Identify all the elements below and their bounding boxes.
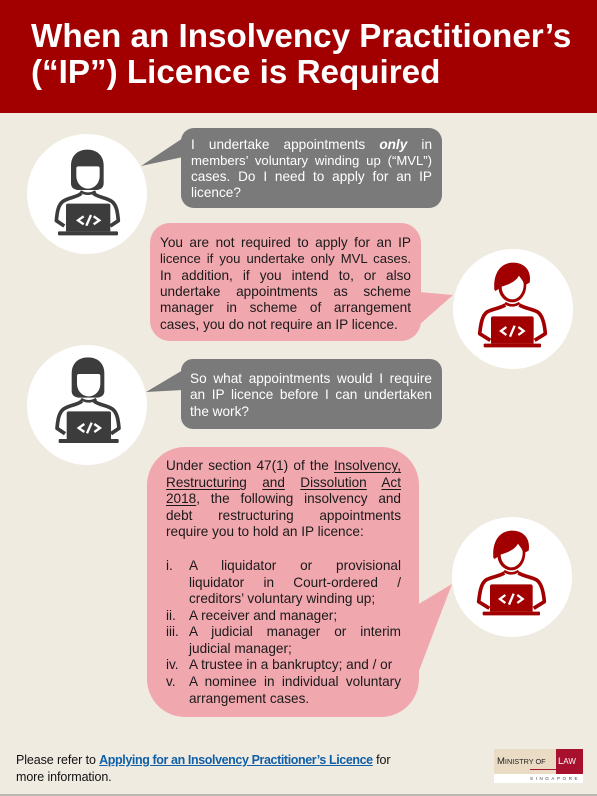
list of appointments (166, 558, 401, 706)
list of appointments: creditors’ voluntary winding up; (189, 591, 375, 606)
list of appointments: arrangement cases. (189, 691, 309, 706)
question bubble 1 (181, 128, 442, 208)
logo: Ministry of Law Singapore: SINGAPORE (530, 776, 580, 781)
answer 2 text: require you to hold an IP licence: (166, 524, 364, 539)
list of appointments: A trustee in a bankruptcy; and / or (189, 657, 392, 672)
title text (31, 18, 571, 91)
logo: Ministry of Law Singapore: MINISTRY OF (497, 756, 546, 767)
footer note (16, 753, 390, 784)
avatar: female user 2 (27, 345, 147, 465)
list of appointments: iii. (166, 624, 179, 639)
answer 2 text (166, 458, 401, 706)
list of appointments: A nominee in individual voluntary (189, 674, 401, 689)
question bubble 2 (181, 359, 442, 429)
list of appointments: A liquidator or provisional (189, 558, 401, 573)
list of appointments: ii. (166, 608, 176, 623)
question 1 text: members’ voluntary winding up (“MVL”) (191, 153, 432, 168)
answer 2 text: Under section 47(1) of the Insolvency, (166, 458, 401, 473)
question 2 text (190, 371, 432, 419)
answer bubble 2 (147, 447, 419, 717)
list of appointments: judicial manager; (189, 641, 292, 656)
question 1 text (191, 137, 432, 200)
answer 1 text: You are not required to apply for an IP (160, 235, 411, 250)
list of appointments: A judicial manager or interim (189, 624, 401, 639)
answer 1 text: cases, you do not require an IP licence. (160, 317, 398, 332)
title text: When an Insolvency Practitioner’s (31, 18, 571, 55)
question 2 text: an IP licence before I can undertaken (190, 387, 432, 402)
answer 2 text: 2018, the following insolvency and (166, 491, 401, 506)
title banner (0, 0, 597, 113)
logo: Ministry of Law Singapore (494, 749, 583, 783)
list of appointments: A receiver and manager; (189, 608, 337, 623)
answer 1 text: licence if you undertake only MVL cases. (160, 251, 411, 266)
question 1 text: I undertake appointments only in (191, 137, 432, 152)
avatar: female user 1 (27, 134, 147, 254)
avatar: male adviser 2 (452, 517, 572, 637)
answer 2 text: Restructuring and Dissolution Act (166, 475, 401, 490)
answer 2 text: debt restructuring appointments (166, 508, 401, 523)
title text: (“IP”) Licence is Required (31, 54, 440, 91)
answer 1 text: manager in scheme of arrangement (160, 300, 411, 315)
list of appointments: iv. (166, 657, 179, 672)
answer 1 text (160, 235, 411, 332)
bottom edge line (0, 794, 597, 796)
question 1 text: cases. Do I need to apply for an IP (191, 169, 432, 184)
footer note: Please refer to Applying for an Insolvency Practitioner’s Licence for (16, 753, 390, 767)
question 2 text: So what appointments would I require (190, 371, 432, 386)
question 1 text: licence? (191, 185, 241, 200)
list of appointments: i. (166, 558, 173, 573)
footer note: more information. (16, 770, 112, 784)
logo: Ministry of Law Singapore: LAW (558, 756, 576, 767)
list of appointments: v. (166, 674, 176, 689)
answer 1 text: undertake appointments as scheme (160, 284, 411, 299)
answer 1 text: In addition, if you intend to, or also (160, 268, 411, 283)
question 2 text: the work? (190, 404, 249, 419)
answer bubble 1 (150, 223, 421, 341)
avatar: male adviser 1 (453, 249, 573, 369)
list of appointments: liquidator in Court-ordered / (189, 575, 401, 590)
